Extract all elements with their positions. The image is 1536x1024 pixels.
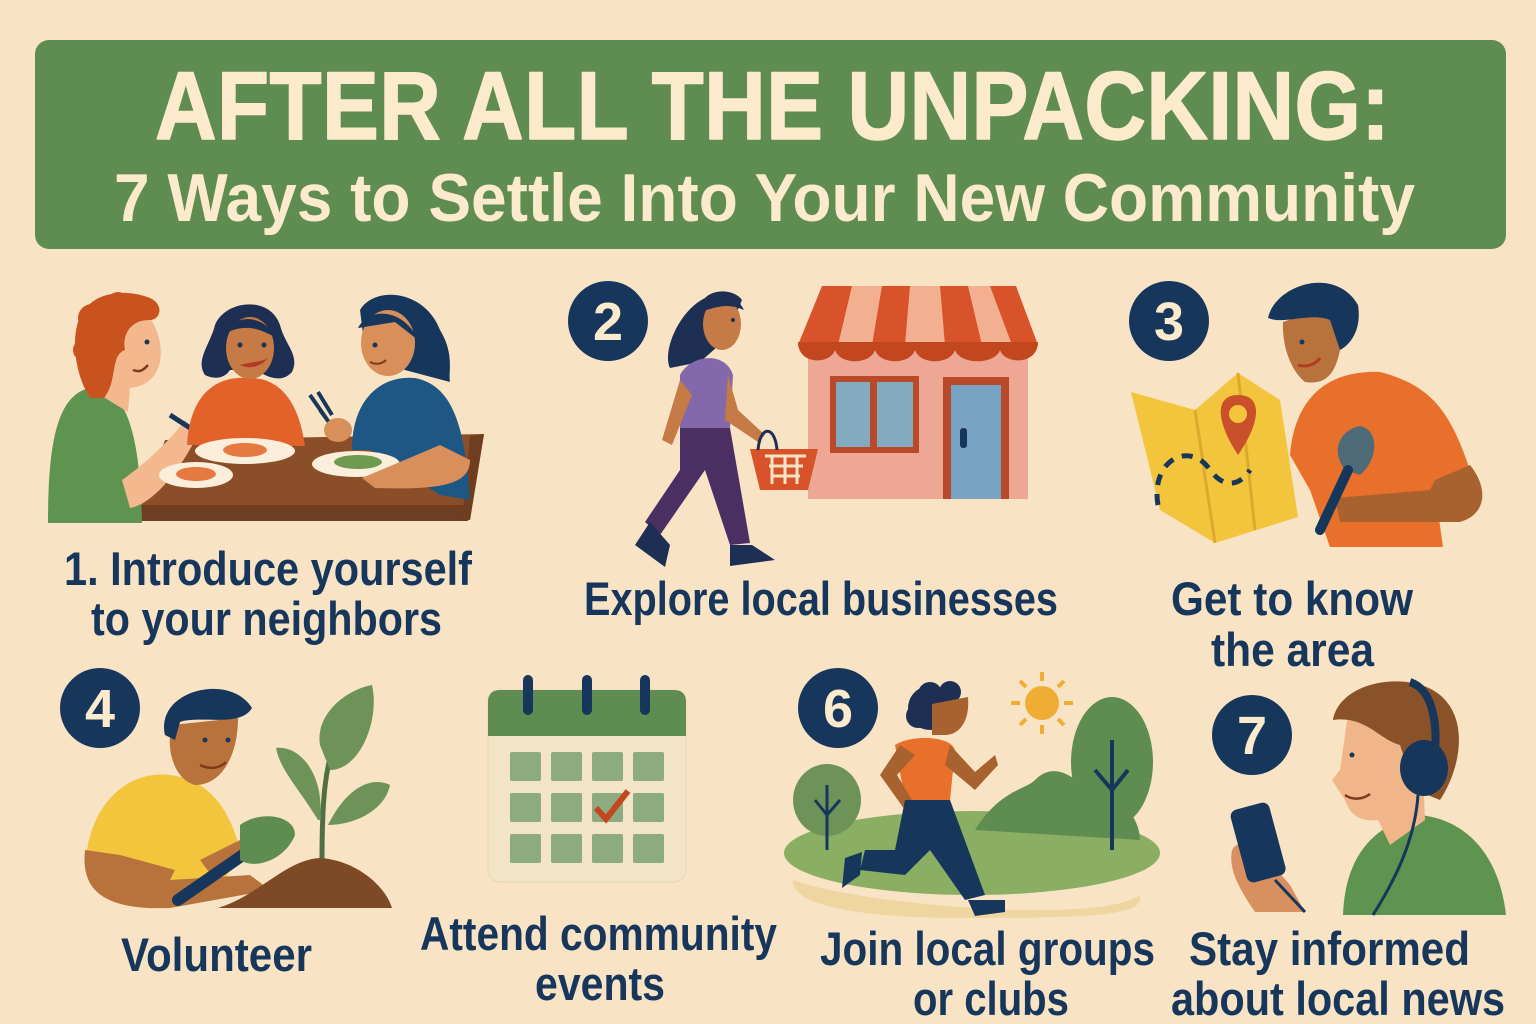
caption 7	[1171, 922, 1505, 1024]
caption 6	[820, 922, 1155, 1024]
number badge 4: 4	[85, 679, 115, 739]
illustration: neighbors sharing a meal	[48, 292, 484, 523]
illustration: volunteer planting	[84, 685, 392, 908]
caption 1: to your neighbors	[91, 592, 442, 645]
illustration: calendar	[488, 675, 686, 882]
number badge 4	[60, 668, 140, 748]
illustration: person with map	[1131, 283, 1482, 547]
title banner	[35, 40, 1506, 249]
caption 3: Get to know	[1171, 572, 1413, 625]
illustration: woman walking with basket	[635, 291, 818, 567]
illustration: runner in park	[784, 672, 1160, 918]
number badge 6	[798, 668, 878, 748]
caption 5	[420, 907, 777, 1010]
number badge 6: 6	[823, 679, 853, 739]
caption 4: Volunteer	[121, 928, 312, 981]
caption 7: Stay informed	[1189, 922, 1470, 975]
number badge 2	[568, 281, 648, 361]
number badge 7: 7	[1237, 706, 1267, 766]
caption 5: events	[535, 957, 665, 1010]
illustration: storefront	[798, 286, 1038, 499]
title: AFTER ALL THE UNPACKING:	[155, 52, 1390, 160]
caption 6: Join local groups	[820, 922, 1155, 975]
number badge 7	[1212, 695, 1292, 775]
caption 6: or clubs	[913, 972, 1069, 1024]
caption 3: the area	[1211, 623, 1375, 676]
caption 1: 1. Introduce yourself	[64, 542, 472, 595]
number badge 3: 3	[1154, 292, 1184, 352]
caption 5: Attend community	[420, 907, 777, 960]
caption 2: Explore local businesses	[584, 572, 1058, 625]
caption 3	[1171, 572, 1413, 676]
subtitle: 7 Ways to Settle Into Your New Community	[114, 160, 1415, 236]
number badge 2: 2	[593, 292, 623, 352]
illustration: person with headphones and phone	[1229, 681, 1506, 915]
caption 1	[64, 542, 472, 645]
number badge 3	[1129, 281, 1209, 361]
